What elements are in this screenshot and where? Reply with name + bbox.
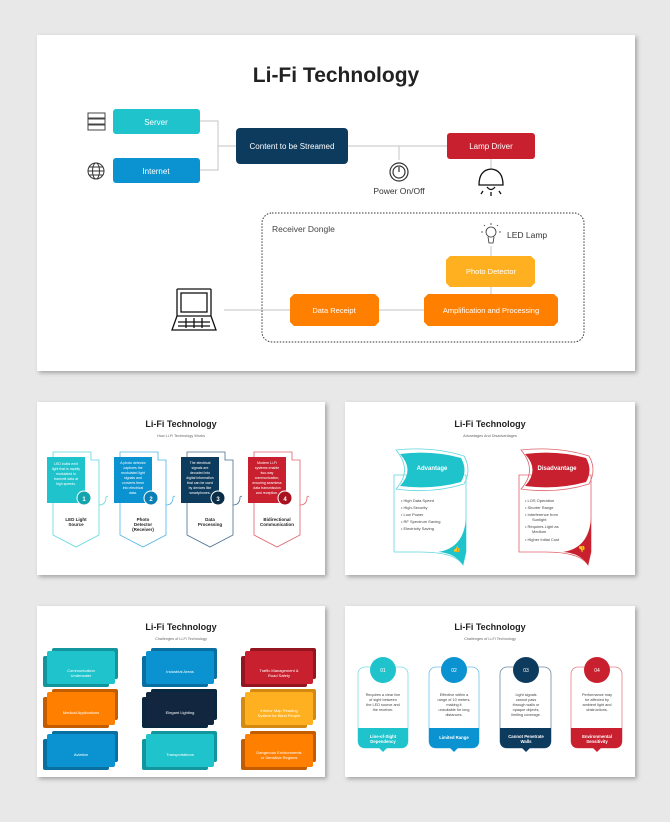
box: Amplification and Processing: Amplification and Processing — [443, 306, 539, 315]
disadvantage card: Medium — [532, 529, 547, 534]
step 2: captures the — [123, 466, 143, 470]
card 01: the LED source and — [366, 703, 400, 707]
tile grid: Medical Applications — [63, 710, 99, 715]
tile grid: Aviation — [74, 752, 88, 757]
step 3: Data — [205, 517, 215, 522]
box: Content to be Streamed: Content to be Streamed — [250, 142, 334, 151]
advantage card: • Low Power — [401, 512, 424, 517]
disadvantage card: Disadvantage — [537, 466, 577, 472]
card 02: 02 — [451, 668, 457, 674]
heading: Li-Fi Technology — [454, 419, 526, 429]
box: Photo Detector — [446, 256, 535, 287]
step 3: that can be used — [187, 481, 213, 485]
step 1: modulated to — [56, 472, 76, 476]
step 1: transmit data at — [54, 477, 78, 481]
card 03: Light signals — [515, 693, 537, 697]
step 4: Modern Li-Fi — [257, 461, 277, 465]
step 3: 3 — [216, 497, 220, 503]
heading: Li-Fi Technology — [145, 622, 217, 632]
tile grid: Interior Map Reading — [260, 708, 298, 713]
connector lines — [200, 121, 491, 310]
tile grid: System for Blind People — [258, 713, 301, 718]
card 03: opaque objects, — [513, 708, 539, 712]
tile grid: or Sensitive Regions — [261, 755, 297, 760]
disadvantage card: • Requires Light as — [525, 524, 559, 529]
step 2: 2 — [149, 497, 153, 503]
step 4: ensuring seamless — [252, 481, 282, 485]
step 1 — [47, 452, 108, 547]
card 03: through walls or — [513, 703, 540, 707]
card 01: the receiver. — [373, 708, 393, 712]
icon: LED lamp — [481, 223, 501, 243]
card 04: Environmental — [582, 734, 612, 739]
label: LED Lamp: LED Lamp — [507, 230, 547, 240]
panel: challenges tiles: Challenges of Li-Fi Technology — [155, 637, 207, 641]
disadvantage card: • Shorter Range — [525, 505, 554, 510]
advantage card: Advantage — [417, 466, 448, 472]
card 04: 04 — [594, 668, 600, 674]
card 04: Sensitivity — [586, 739, 608, 744]
step 1: 1 — [82, 497, 86, 503]
card 02: range of 10 meters, — [438, 698, 470, 702]
disadvantage card: • Interference from — [525, 512, 559, 517]
box: Amplification and Processing — [424, 294, 558, 326]
icon: globe — [88, 163, 104, 179]
step 4: systems enable — [255, 466, 279, 470]
card 01: Dependency — [370, 739, 396, 744]
card 01 — [358, 657, 408, 752]
step 1: light that is rapidly — [52, 467, 80, 471]
disadvantage card — [519, 449, 593, 565]
box: Internet — [113, 158, 200, 183]
tile grid: Transportations — [166, 752, 194, 757]
step 3: The electrical — [190, 461, 211, 465]
step 2: modulated light — [121, 471, 145, 475]
card 02: distances. — [445, 713, 463, 717]
disadvantage card: 👎 — [578, 545, 586, 553]
step 2: data. — [129, 491, 137, 495]
tile grid: Dangerous Environments — [256, 750, 302, 755]
tile grid: Elegant Lighting — [166, 710, 194, 715]
card 01: 01 — [380, 668, 386, 674]
advantage card — [394, 449, 468, 565]
icon: power — [390, 163, 408, 181]
step 4: two-way — [261, 471, 274, 475]
tile grid: Underwater — [71, 673, 92, 678]
step 2: (Receiver) — [132, 527, 154, 532]
panel: challenges tiles — [37, 606, 325, 777]
box: Content to be Streamed — [236, 128, 348, 164]
panel: main diagram slide — [37, 35, 635, 371]
card 03: limiting coverage. — [511, 713, 541, 717]
card 03: Cannot Penetrate — [508, 734, 544, 739]
card 03: Walls — [520, 739, 532, 744]
card 03: cannot pass — [516, 698, 536, 702]
box: Server — [113, 109, 200, 134]
box: Server: Server — [144, 118, 168, 127]
label: Power On/Off: Power On/Off — [373, 186, 425, 196]
card 04: ambient light and — [583, 703, 611, 707]
icon: lamp — [479, 169, 503, 196]
panel: challenge cards — [345, 606, 635, 777]
card 03 — [500, 657, 551, 752]
card 02: Limited Range — [439, 735, 469, 740]
dashed receiver box: Receiver Dongle — [272, 224, 335, 234]
step 2: converts them — [122, 481, 144, 485]
disadvantage card: • LOS Operation — [525, 498, 554, 503]
step 1: high speeds. — [56, 482, 76, 486]
disadvantage card: Sunlight — [532, 517, 547, 522]
step 1: LED Light — [65, 517, 87, 522]
step 2 — [114, 452, 175, 547]
card 02 — [429, 657, 479, 752]
step 4: Communication — [260, 522, 294, 527]
advantage card: • Electricity Saving — [401, 526, 434, 531]
card 04: obstructions. — [586, 708, 608, 712]
step 2: A photo detector — [120, 461, 147, 465]
box: Internet: Internet — [142, 167, 170, 176]
step 4: and reception. — [256, 491, 278, 495]
panel: how Li-Fi works — [37, 402, 325, 575]
dashed receiver box — [262, 213, 584, 342]
tile grid — [43, 648, 316, 770]
step 3: decoded into — [190, 471, 210, 475]
box: Data Receipt — [290, 294, 379, 326]
disadvantage card: • Higher Initial Cost — [525, 537, 560, 542]
step 4: data transmission — [253, 486, 281, 490]
step 3: by devices like — [189, 486, 211, 490]
panel: how Li-Fi works: How Li-Fi Technology Works — [157, 434, 205, 438]
step 4 — [248, 452, 309, 547]
card 01: Line-of-Sight — [370, 734, 397, 739]
advantage card: 👍 — [453, 545, 461, 553]
step 3: signals are — [192, 466, 209, 470]
card 03: 03 — [523, 668, 529, 674]
step 2: Photo — [137, 517, 150, 522]
tile grid: Industrial Areas — [166, 669, 194, 674]
icon: server — [88, 113, 105, 130]
step 3: digital information — [186, 476, 214, 480]
step 3: Processing — [198, 522, 222, 527]
step 3 — [181, 452, 242, 547]
panel: challenge cards: Challenges of Li-Fi Technology — [464, 637, 516, 641]
panel: advantages and disadvantages: Advantages And Disadvantages — [463, 434, 517, 438]
step 3: smartphones. — [189, 491, 211, 495]
heading: Li-Fi Technology — [145, 419, 217, 429]
box: Lamp Driver: Lamp Driver — [469, 142, 513, 151]
step 1: Source — [68, 522, 84, 527]
tile grid: Road Safety — [268, 673, 290, 678]
step 2: into electrical — [123, 486, 143, 490]
box: Photo Detector: Photo Detector — [466, 267, 517, 276]
card 01: Requires a clear line — [366, 693, 400, 697]
advantage card: • High Data Speed — [401, 498, 434, 503]
title: Li-Fi Technology — [253, 64, 420, 87]
step 4: Bidirectional — [263, 517, 291, 522]
card 04 — [571, 657, 622, 752]
card 02: making it — [446, 703, 463, 707]
advantage card: • High-Security — [401, 505, 428, 510]
box: Data Receipt: Data Receipt — [312, 306, 357, 315]
card 02: Effective within a — [440, 693, 469, 697]
step 1: LED bulbs emit — [54, 462, 78, 466]
card 01: of sight between — [369, 698, 397, 702]
box: Lamp Driver — [447, 133, 535, 159]
card 02: unsuitable for long — [438, 708, 470, 712]
step 2: signals and — [124, 476, 142, 480]
panel: advantages and disadvantages — [345, 402, 635, 575]
card 04: Performance may — [582, 693, 612, 697]
tile grid: Traffic Management & — [259, 668, 299, 673]
step 4: 4 — [283, 497, 287, 503]
step 4: communication, — [255, 476, 279, 480]
tile grid: Communication — [67, 668, 95, 673]
advantage card: • RF Spectrum Saving — [401, 519, 440, 524]
step 2: Detector — [134, 522, 152, 527]
icon: laptop — [172, 289, 216, 330]
card 04: be affected by — [585, 698, 609, 702]
heading: Li-Fi Technology — [454, 622, 526, 632]
